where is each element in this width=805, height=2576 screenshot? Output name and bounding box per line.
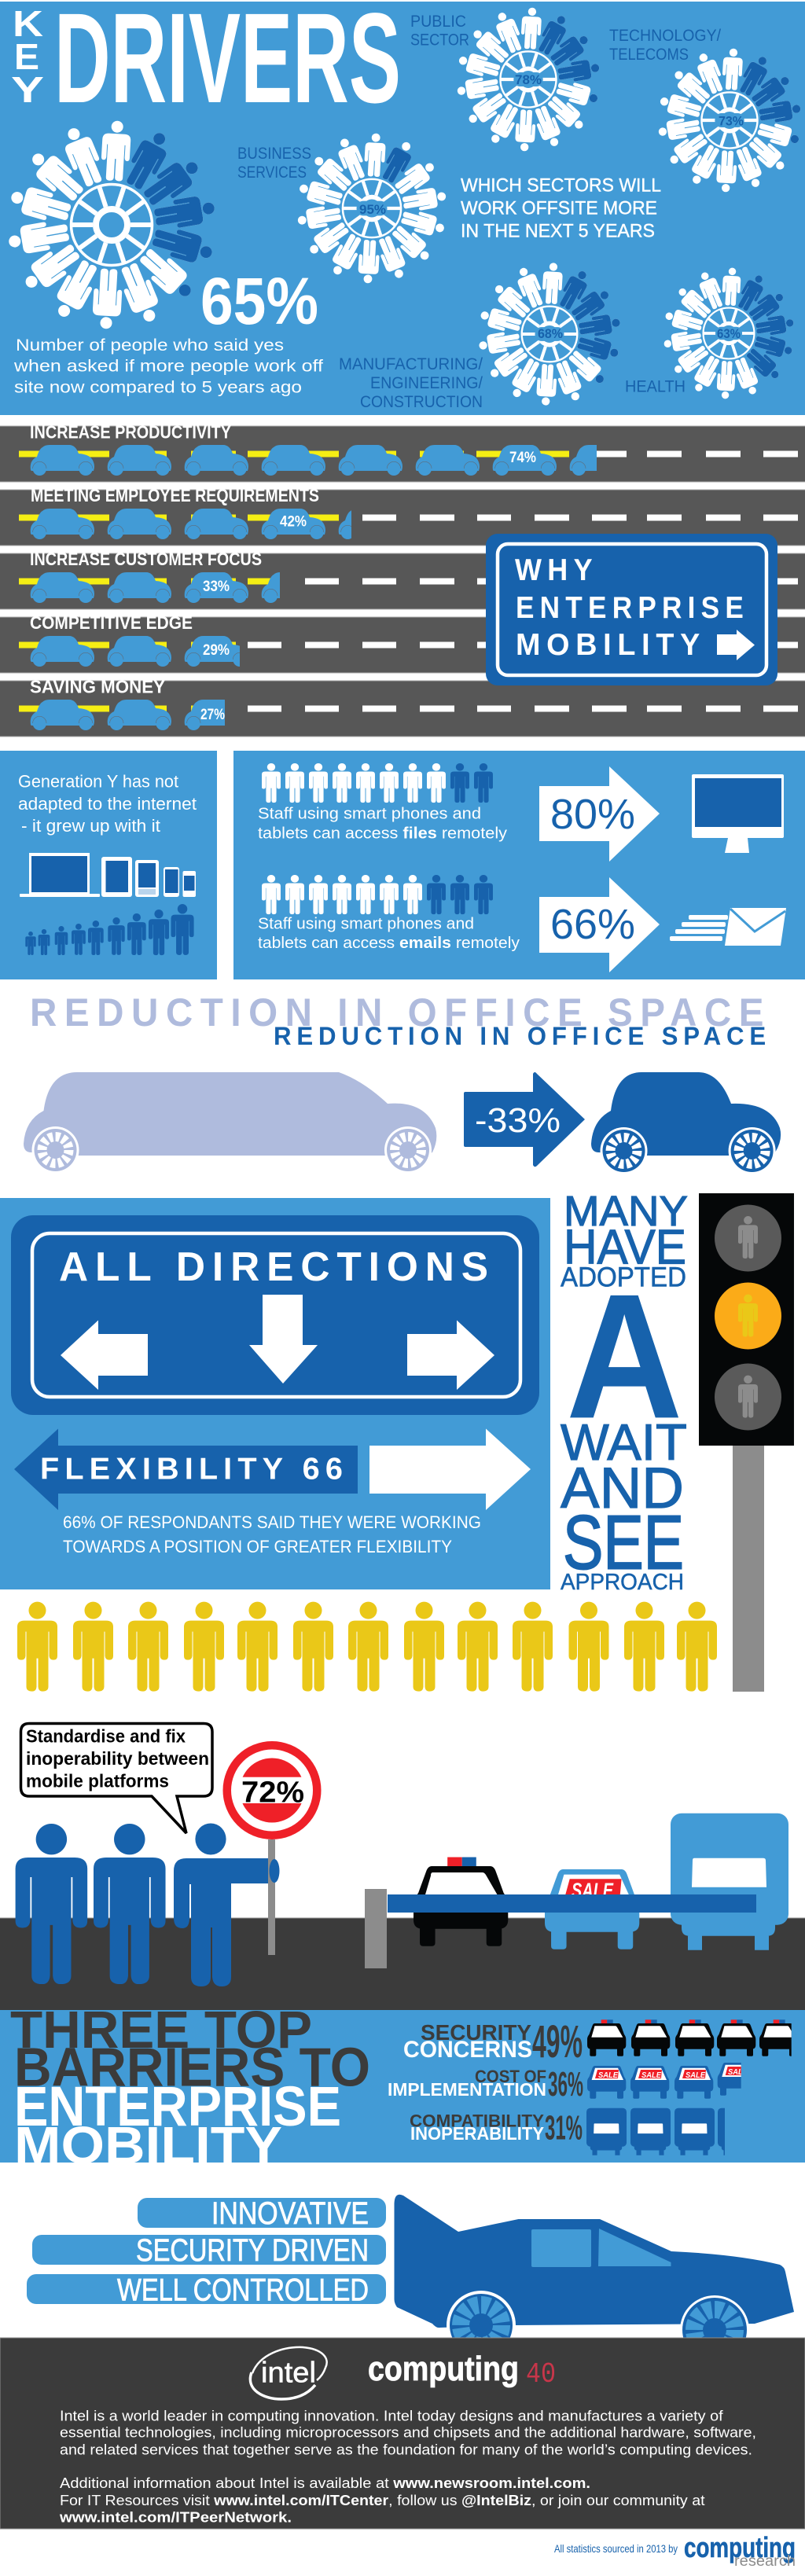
heading: three top barriers to enterprise mobility: ENTERPRISE (14, 2076, 341, 2138)
text: which sectors: WORK OFFSITE MORE (461, 198, 657, 219)
text: about intel: www.intel.com/ITPeerNetwork. (59, 2509, 292, 2525)
text: respondents: TOWARDS A POSITION OF GREATER FLEXIBILITY (63, 1537, 452, 1556)
sign: why enterprise mobility: MOBILITY (516, 628, 706, 662)
pictogram: yellow people row (17, 1602, 717, 1692)
logo: computing 40: computing (368, 2350, 519, 2388)
chart: 65 percent people wheel (6, 120, 217, 329)
icon: monitor (692, 774, 784, 853)
callout: standardise (20, 1723, 212, 1833)
text: emails (258, 915, 520, 952)
road: increase customer focus (19, 549, 798, 603)
text: number of people: Number of people who said yes (16, 336, 284, 355)
sign: why enterprise mobility: ENTERPRISE (516, 591, 749, 625)
sector labels: TECHNOLOGY/ (609, 27, 721, 45)
scene: road block (0, 1723, 805, 2010)
pill: security driven: SECURITY DRIVEN (136, 2233, 369, 2268)
row: cost of implementation 36 percent: IMPLEMENTATION (388, 2079, 546, 2100)
callout: standardise: Standardise and fix (26, 1726, 186, 1747)
road: increase productivity (19, 422, 798, 476)
stat: 65 percent: 65% (200, 264, 318, 338)
road: saving money: 27% (200, 707, 225, 723)
arrow: minus 33 percent (464, 1072, 585, 1167)
text: files: tablets can access files remotely (258, 825, 508, 843)
pictogram: 80 percent staff (262, 763, 493, 803)
text: many have adopted a wait and see approach (561, 1188, 688, 1595)
text: number of people: when asked if more people work off (13, 357, 323, 376)
text: emails: tablets can access emails remotely (258, 934, 520, 952)
text: about intel: Additional information about Intel is available at www.newsroom.intel.com. (60, 2475, 590, 2491)
panel: footer (0, 2338, 805, 2529)
icon: envelope (670, 908, 786, 946)
sign: all directions: ALL DIRECTIONS (59, 1244, 495, 1290)
panel: generation y (0, 751, 217, 979)
row: cost of implementation 36 percent: SALE (728, 2067, 748, 2077)
arrow: 66 percent: 66% (550, 901, 635, 948)
heading: three top barriers to enterprise mobility: BARRIERS TO (14, 2036, 370, 2097)
icon: left arrow (61, 1321, 148, 1390)
text: about intel: Intel is a world leader in computing innovation. Intel today designs and manufactures a variety of (60, 2408, 724, 2423)
sector labels: SERVICES (237, 164, 307, 182)
title: key (11, 3, 44, 110)
road: saving money (19, 677, 798, 730)
icon: pickup car (395, 2195, 794, 2365)
wheel percentages: 78% (515, 72, 542, 87)
callout: standardise: inoperability between (26, 1748, 209, 1769)
icon: right arrow (407, 1321, 494, 1390)
icons: growing people (25, 904, 194, 955)
text: about intel (59, 2408, 756, 2525)
arrow: white right (369, 1429, 531, 1510)
text: about intel: essential technologies, including microprocessors and chipsets and the additional hardware, software, (60, 2425, 756, 2441)
barrier (365, 1889, 756, 1968)
icon: traffic light (699, 1193, 794, 1692)
panel: key drivers (0, 0, 805, 415)
sector labels: SECTOR (410, 31, 469, 49)
text: generation y: - it grew up with it (21, 816, 160, 836)
callout: standardise: mobile platforms (26, 1770, 169, 1791)
road: increase customer focus: 33% (203, 579, 230, 595)
road: meeting employee requirements (19, 485, 798, 539)
row: cost of implementation 36 percent: COST OF (475, 2067, 546, 2086)
sector labels: CONSTRUCTION (360, 393, 483, 411)
icon: down arrow (249, 1295, 318, 1384)
icon: sign arrow (717, 630, 755, 660)
arrow: 66 percent (539, 877, 660, 972)
icons: devices (20, 853, 196, 897)
wheel percentages: 68% (538, 326, 563, 341)
sign post: 72 percent (223, 1741, 321, 1955)
pill: innovative: INNOVATIVE (211, 2196, 369, 2231)
row: cost of implementation 36 percent: SALE (686, 2071, 706, 2080)
chart: health wheel (663, 267, 795, 399)
heading: three top barriers to enterprise mobility (11, 2011, 368, 2163)
text: many have adopted a wait and see approach: SEE (563, 1500, 684, 1586)
chart: business services wheel (296, 133, 447, 284)
row: cost of implementation 36 percent: SALE (641, 2071, 662, 2080)
title: key: Y (11, 69, 44, 110)
road: saving money: SAVING MONEY (30, 677, 165, 697)
text: respondents: 66% OF RESPONDANTS SAID THEY WERE WORKING (63, 1512, 481, 1532)
pill: security driven (32, 2233, 386, 2268)
text: number of people: site now compared to 5 years ago (14, 378, 302, 397)
row: cost of implementation 36 percent: SALE (598, 2071, 619, 2080)
row: compatibility inoperability 31 percent: 31% (545, 2109, 583, 2148)
text: many have adopted a wait and see approach: ADOPTED (561, 1262, 686, 1293)
text: generation y (18, 772, 197, 836)
logo: computing 40: 40 (526, 2358, 556, 2390)
text: respondents (63, 1512, 481, 1556)
text: files: Staff using smart phones and (258, 805, 481, 823)
row: security concerns 49 percent: SECURITY (421, 2020, 531, 2045)
text: many have adopted a wait and see approach: APPROACH (561, 1570, 684, 1595)
pill: well controlled: WELL CONTROLLED (117, 2273, 369, 2308)
panel: flexibility (0, 1198, 550, 1589)
wheel percentages: 63% (717, 326, 741, 341)
arrow: 80 percent (539, 766, 660, 862)
wheel percentages: 95% (359, 202, 386, 217)
panel: staff access (233, 751, 805, 979)
chart: manufacturing wheel (477, 263, 622, 406)
arrow: flexibility 66: FLEXIBILITY 66 (40, 1453, 348, 1486)
panel: innovative pickup (27, 2195, 794, 2365)
text: files (258, 805, 508, 843)
sector labels: HEALTH (625, 377, 686, 396)
chart: technology wheel (657, 48, 802, 193)
sign: all directions (11, 1215, 539, 1415)
arrow: flexibility 66 (14, 1429, 358, 1510)
row: cost of implementation 36 percent: 36% (548, 2065, 583, 2104)
logo: intel (250, 2347, 327, 2399)
title: key: E (14, 36, 39, 77)
text: about intel: and related services that together serve as the foundation for many of the world’s computing devices. (60, 2442, 752, 2457)
text: which sectors: IN THE NEXT 5 YEARS (461, 221, 655, 242)
row: security concerns 49 percent (404, 2019, 792, 2058)
text: sources (554, 2531, 796, 2570)
pictogram: 66 percent staff (262, 875, 493, 914)
road: meeting employee requirements: 42% (280, 514, 307, 531)
heading: three top barriers to enterprise mobility: THREE TOP (10, 2001, 312, 2060)
row: cost of implementation 36 percent (388, 2063, 741, 2099)
icon: long car (24, 1072, 436, 1174)
sector labels: BUSINESS (237, 145, 311, 163)
icon: police car (414, 1858, 508, 1946)
sign: why enterprise mobility (486, 534, 777, 685)
row: compatibility inoperability 31 percent (410, 2108, 758, 2155)
panel: reduction in office space (24, 990, 781, 1174)
heading: solid: REDUCTION IN OFFICE SPACE (274, 1022, 771, 1050)
road: competitive edge: 29% (203, 642, 230, 659)
text: about intel: For IT Resources visit www.intel.com/ITCenter , follow us @IntelBiz , or join our community at (60, 2493, 705, 2508)
pill: innovative (138, 2196, 386, 2231)
pill: well controlled (27, 2273, 386, 2308)
icon: sale car (545, 1869, 639, 1949)
text: many have adopted a wait and see approach: MANY (564, 1188, 688, 1235)
road: competitive edge: COMPETITIVE EDGE (30, 612, 193, 633)
sector labels: ENGINEERING/ (370, 374, 483, 392)
wheel percentages (359, 72, 744, 341)
sign post: 72 percent: 72% (241, 1777, 304, 1810)
text: emails: Staff using smart phones and (258, 915, 474, 933)
logo: computing research: research (734, 2553, 796, 2570)
arrow: 80 percent: 80% (550, 791, 635, 838)
sector labels: TELECOMS (609, 46, 689, 64)
text: number of people (13, 336, 323, 397)
road: meeting employee requirements: MEETING EMPLOYEE REQUIREMENTS (31, 485, 319, 505)
row: compatibility inoperability 31 percent: INOPERABILITY (410, 2123, 544, 2144)
text: many have adopted a wait and see approach: A (566, 1256, 682, 1455)
row: compatibility inoperability 31 percent: COMPATIBILITY (410, 2111, 544, 2131)
sector labels: PUBLIC (410, 13, 466, 31)
sector labels (237, 13, 721, 411)
sector labels: MANUFACTURING/ (339, 355, 483, 373)
text: many have adopted a wait and see approach: HAVE (564, 1221, 686, 1275)
text: many have adopted a wait and see approach: WAIT (561, 1413, 687, 1471)
panel: road chart of reasons (0, 422, 805, 737)
arrow: minus 33 percent: -33% (475, 1101, 561, 1140)
text: which sectors (461, 175, 661, 242)
road: increase productivity: 74% (509, 450, 536, 466)
road: competitive edge (19, 612, 798, 667)
icon: sale car: SALE (572, 1879, 614, 1902)
wheel percentages: 73% (719, 113, 744, 129)
row: security concerns 49 percent: CONCERNS (403, 2037, 532, 2063)
row: security concerns 49 percent: 49% (532, 2016, 583, 2067)
text: generation y: adapted to the internet (18, 794, 197, 814)
heading: faded: REDUCTION IN OFFICE SPACE (30, 990, 771, 1034)
people: blue group (16, 1824, 271, 1986)
icon: short car (591, 1072, 781, 1174)
title: key: K (13, 3, 43, 44)
heading: three top barriers to enterprise mobility: MOBILITY (14, 2116, 282, 2175)
logo: intel: intel (261, 2357, 316, 2389)
chart: public sector wheel (456, 7, 601, 152)
road: increase customer focus: INCREASE CUSTOMER FOCUS (30, 549, 262, 569)
icon: truck (671, 1813, 788, 1950)
text: which sectors: WHICH SECTORS WILL (461, 175, 661, 197)
sign: why enterprise mobility: WHY (515, 553, 598, 587)
text: many have adopted a wait and see approach: AND (561, 1457, 684, 1520)
panel: three top barriers (0, 2010, 805, 2163)
text: generation y: Generation Y has not (18, 772, 178, 792)
text: sources: All statistics sourced in 2013 by (554, 2542, 678, 2555)
road: increase productivity: INCREASE PRODUCTIVITY (30, 422, 231, 443)
